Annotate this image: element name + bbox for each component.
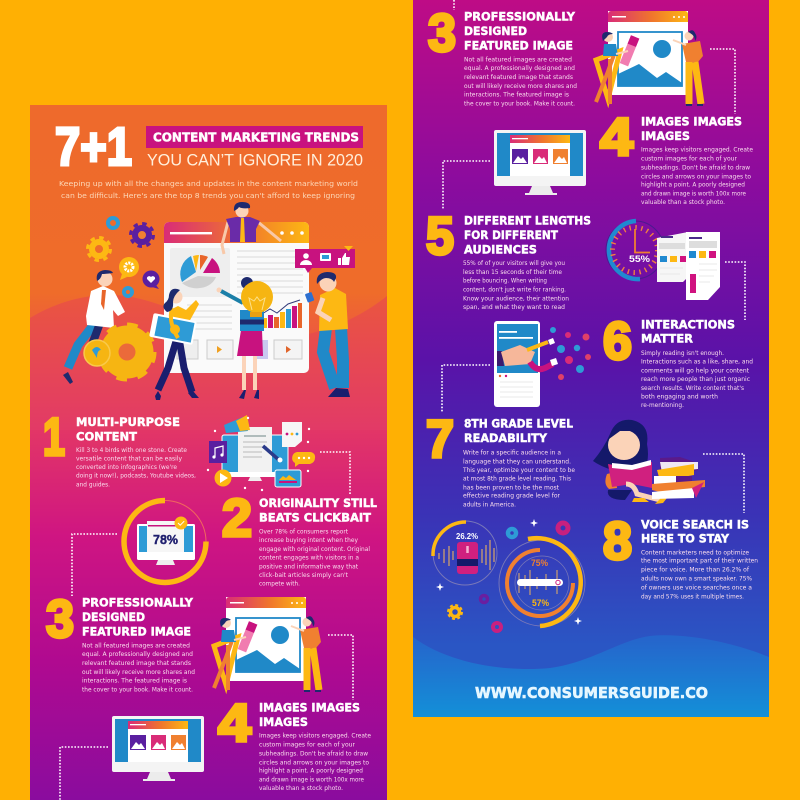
- body text 8: piece for voice. More than 26.2% of: [641, 567, 750, 574]
- body text 7: language that they can understand.: [463, 458, 571, 465]
- heading 1: CONTENT: [76, 430, 137, 444]
- connector 3 to 4: [328, 635, 353, 700]
- heading 6: INTERACTIONS: [641, 317, 735, 331]
- body text 5: 55% of of your visitors will give you: [463, 260, 565, 267]
- body text 4: valuable than a stock photo.: [641, 199, 725, 206]
- number 1: 1: [43, 408, 65, 467]
- panel: right infographic page: [413, 0, 769, 717]
- body text 3: Not all featured images are created: [464, 56, 572, 64]
- body text 6: reach more people than just organic: [641, 376, 750, 383]
- body text 8: day and 57% uses it multiple times.: [641, 593, 744, 600]
- clock with 55%: [606, 221, 664, 279]
- pie chart: [180, 255, 220, 288]
- hero illustration: [63, 202, 355, 400]
- body text 8: the most important part of their written: [641, 558, 758, 565]
- connector stub: [453, 0, 455, 10]
- voice chart 26.2%: [433, 521, 497, 585]
- ring chart 78%: 78%: [153, 532, 178, 547]
- floating gears and bubbles: [88, 218, 160, 296]
- body text 6: search results. Write content that's: [641, 385, 744, 392]
- connector 1 to 2: [320, 452, 350, 495]
- heading 3: DESIGNED: [464, 24, 527, 38]
- heading 7: READABILITY: [464, 431, 548, 445]
- body text 8: [641, 549, 758, 600]
- body text 3: Not all featured images are created: [82, 642, 190, 650]
- body text 3: out will likely receive more shares and: [464, 83, 577, 90]
- section 1: multi-purpose content: [43, 408, 350, 495]
- intro paragraph: [59, 180, 358, 200]
- body text 2: engage with original content. Original: [259, 546, 370, 553]
- body text 5: before bouncing. When writing: [463, 278, 547, 285]
- body text 2: compete with.: [259, 580, 300, 588]
- voice chart 75% and 57%: 57%: [532, 598, 549, 608]
- body text 3: interactions. The featured image is: [464, 92, 569, 99]
- body text 1: and guides.: [76, 482, 110, 488]
- number 4: 4: [600, 108, 634, 167]
- heading 7: 8TH GRADE LEVEL: [464, 416, 574, 430]
- heading 5: FOR DIFFERENT: [464, 228, 558, 242]
- body text 4: and drawn image is worth 100x more: [259, 776, 364, 783]
- body text 5: span, and what they want to read: [463, 304, 565, 311]
- panel: left infographic page: [30, 105, 387, 800]
- heading 3: FEATURED IMAGE: [82, 625, 191, 639]
- body text 6: Simply reading isn't enough.: [641, 350, 724, 357]
- body text 4: Images keep visitors engaged. Create: [259, 733, 371, 740]
- section 2: originality: [72, 489, 378, 596]
- intro paragraph: can be difficult. Here's are the top 8 trends you can't afford to keep ignoring: [61, 192, 355, 200]
- illustration: monitor with images: [112, 716, 204, 781]
- connector 3 to 4: [710, 49, 735, 114]
- body text 1: [76, 447, 196, 488]
- woman with light bulb: [216, 277, 273, 399]
- number 3: 3: [428, 4, 456, 63]
- heading 3: PROFESSIONALLY: [464, 10, 576, 24]
- connector 4 to 5: [60, 747, 108, 800]
- body text 2: [259, 528, 370, 588]
- body text 5: content, don't just write for ranking.: [463, 286, 566, 293]
- heading 3: FEATURED IMAGE: [464, 39, 573, 53]
- heading 4: IMAGES: [641, 129, 690, 143]
- big yellow gear: [84, 326, 153, 378]
- heading 5: [464, 213, 591, 257]
- body text 4: Images keep visitors engaged. Create: [641, 147, 753, 154]
- title subtitle: YOU CAN’T IGNORE IN 2020: [147, 152, 363, 170]
- number 4: 4: [218, 694, 252, 753]
- voice chart 26.2%: 26.2%: [456, 531, 478, 541]
- body text 7: effective reading grade level for: [463, 493, 561, 500]
- body text 5: less than 15 seconds of their time: [463, 269, 562, 276]
- heading 2: BEATS CLICKBAIT: [259, 510, 371, 524]
- body text 4: valuable than a stock photo.: [259, 785, 343, 792]
- title banner: [146, 126, 363, 148]
- heading 2: ORIGINALITY STILL: [259, 496, 378, 510]
- body text 3: [82, 642, 195, 693]
- number 7: 7: [426, 410, 454, 469]
- man with phone: [305, 272, 350, 397]
- body text 8: adults now own a smart speaker. 75%: [641, 576, 752, 583]
- voice chart 75% and 57%: [499, 538, 585, 626]
- website url: WWW.CONSUMERSGUIDE.CO: [475, 684, 708, 702]
- heading 2: [259, 496, 378, 524]
- connector 7 to 8: [703, 454, 744, 513]
- body text 4: custom images for each of your: [641, 156, 738, 163]
- body text 3: equal. A professionally designed and: [82, 651, 193, 658]
- body text 3: equal. A professionally designed and: [464, 65, 575, 72]
- number 8: 8: [603, 512, 632, 571]
- body text 4: [641, 147, 753, 206]
- body text 3: the cover to your book. Make it count.: [464, 100, 575, 107]
- title number 7+1: 7+1: [55, 117, 132, 177]
- title: [55, 117, 363, 177]
- heading 6: MATTER: [641, 332, 693, 346]
- top person: [222, 202, 281, 254]
- body text 2: positive and informative way that: [259, 563, 359, 570]
- section 3 repeated: featured image: [428, 0, 753, 209]
- clock with 55%: 55%: [629, 254, 650, 264]
- number 6: 6: [603, 312, 632, 371]
- heading 3: [82, 596, 194, 639]
- body text 6: [641, 350, 753, 409]
- body text 4: [259, 733, 371, 792]
- number 5: 5: [426, 207, 454, 266]
- body text 6: Interactions such as a like, share, and: [641, 359, 753, 366]
- body text 4: subheadings. Don't be afraid to draw: [259, 751, 368, 758]
- illustration: designers and featured image: [596, 11, 703, 105]
- section 7: readability: [426, 410, 744, 513]
- background wave behind hero: [30, 295, 387, 430]
- browser window: [164, 222, 309, 373]
- section 3: featured image: [46, 590, 353, 700]
- body text 1: versatile content that can be easily: [76, 456, 182, 462]
- heading 6: [641, 317, 735, 346]
- body text 1: Kill 3 to 4 birds with one stone. Create: [76, 447, 187, 454]
- body text 4: circles and arrows on your images to: [641, 173, 751, 180]
- connector 6 to 7: [442, 365, 490, 413]
- body text 7: has been proven to be the most: [463, 484, 560, 491]
- illustration: monitor with images: [494, 130, 586, 195]
- heading 4: IMAGES IMAGES: [259, 701, 360, 715]
- heading 8: VOICE SEARCH IS: [641, 517, 749, 531]
- body text 7: [462, 449, 575, 509]
- body text 1: converted into infographics (we're: [76, 464, 177, 471]
- heading 1: MULTI-PURPOSE: [76, 415, 180, 429]
- body text 3: out will likely receive more shares and: [82, 669, 195, 676]
- body text 7: This year, optimize your content to be: [462, 467, 575, 474]
- body text 2: Over 78% of consumers report: [259, 528, 349, 536]
- body text 3: the cover to your book. Make it count.: [82, 686, 193, 693]
- body text 6: comments will go help your content: [641, 367, 750, 374]
- section 5: different lengths: [426, 207, 745, 320]
- body text 2: content engages with visitors in a: [259, 554, 359, 562]
- title banner: CONTENT MARKETING TRENDS: [153, 130, 359, 144]
- body text 4: highlight a point. A poorly designed: [641, 182, 745, 189]
- person pushing gear: [63, 270, 125, 384]
- heading 4: IMAGES IMAGES: [641, 115, 742, 129]
- body text 4: custom images for each of your: [259, 742, 356, 749]
- heading 7: [464, 416, 574, 445]
- heading 3: DESIGNED: [82, 610, 145, 624]
- body text 8: Content marketers need to optimize: [641, 549, 749, 556]
- heading 4: [259, 701, 360, 729]
- body text 2: click-bait articles simply can't: [259, 572, 349, 579]
- number 2: 2: [222, 489, 252, 548]
- heading 5: AUDIENCES: [464, 243, 537, 257]
- body text 4: circles and arrows on your images to: [259, 759, 369, 766]
- body text 4: highlight a point. A poorly designed: [259, 768, 363, 775]
- ring chart 78%: [124, 500, 206, 582]
- body text 4: subheadings. Don't be afraid to draw: [641, 165, 750, 172]
- social bubble: [295, 246, 355, 273]
- document icons: [657, 232, 720, 300]
- section 4: images: [60, 694, 371, 800]
- illustration: girl reading with books: [593, 420, 705, 504]
- body text 3: [464, 56, 577, 107]
- number 3: 3: [46, 590, 74, 649]
- connector 2 to 3: [72, 534, 117, 596]
- section 8: voice search: [433, 512, 758, 631]
- body text 4: and drawn image is worth 100x more: [641, 190, 746, 197]
- body text 3: relevant featured image that stands: [464, 74, 573, 81]
- body text 3: interactions. The featured image is: [82, 678, 187, 685]
- connector 5 to 6: [725, 262, 745, 320]
- illustration: content repurposing monitor: [207, 415, 315, 491]
- heading 5: DIFFERENT LENGTHS: [464, 213, 591, 227]
- body text 7: adults in America.: [463, 502, 516, 509]
- body text 6: re-mentioning.: [641, 402, 684, 409]
- bottom wave: [413, 635, 769, 717]
- illustration: designers and featured image: [214, 597, 321, 691]
- body text 6: both engaging and worth: [641, 394, 718, 401]
- decorative gears and sparkles: [436, 519, 582, 631]
- woman with tablet: [149, 289, 199, 400]
- heading 1: [76, 415, 180, 444]
- body text 7: at most 8th grade level reading. This: [463, 476, 571, 483]
- heading 4: IMAGES: [259, 715, 308, 729]
- body text 7: Write for a specific audience in a: [463, 449, 561, 456]
- heading 3: [464, 10, 576, 53]
- heading 3: PROFESSIONALLY: [82, 596, 194, 610]
- section 6: interactions: [442, 312, 753, 413]
- illustration: phone with magnet: [494, 321, 591, 407]
- bar chart with trend line: [262, 300, 302, 328]
- heading 4: [641, 115, 742, 143]
- body text 2: increase buying intent when they: [259, 537, 358, 544]
- body text 5: [463, 260, 569, 311]
- body text 3: relevant featured image that stands: [82, 660, 191, 667]
- connector 4 to 5: [443, 161, 490, 209]
- body text 5: Know your audience, their attention: [463, 295, 569, 302]
- intro paragraph: Keeping up with all the changes and updates in the content marketing world: [59, 180, 358, 188]
- heading 8: [641, 517, 749, 546]
- body text 8: of owners use voice searches once a: [641, 584, 752, 591]
- body text 1: doing it now!), podcasts, Youtube videos,: [76, 472, 196, 480]
- voice chart 75% and 57%: 75%: [531, 558, 548, 568]
- heading 8: HERE TO STAY: [641, 532, 730, 546]
